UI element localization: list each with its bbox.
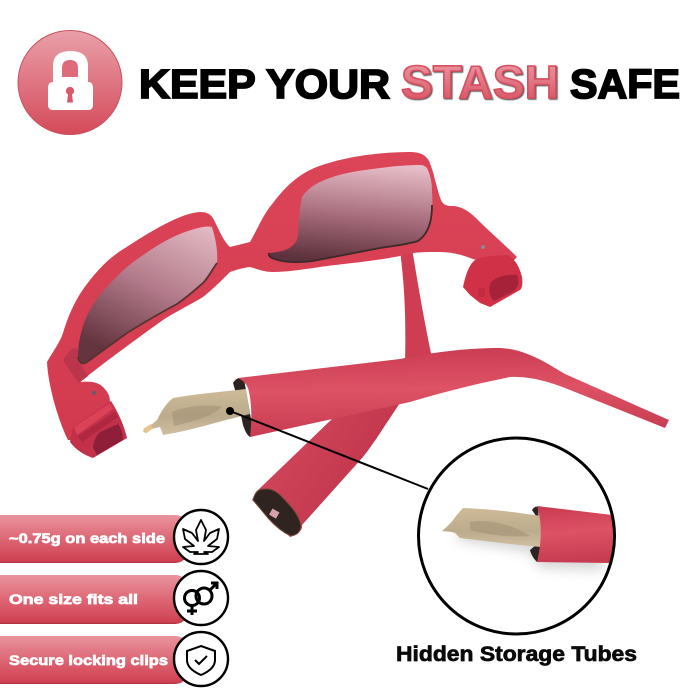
icon: gender symbols <box>174 571 228 625</box>
lower storage tube <box>252 403 400 537</box>
title: STASH <box>401 56 559 108</box>
tube interior <box>233 378 254 437</box>
feature bar: fit: One size fits all <box>9 591 138 607</box>
feature bar: capacity: ~0.75g on each side <box>9 530 165 546</box>
title: KEEP YOUR <box>139 61 390 107</box>
sunglasses <box>47 152 522 458</box>
left lens <box>78 227 217 363</box>
icon: cannabis leaf <box>174 510 228 564</box>
zoom circle callout <box>418 438 614 634</box>
pre-roll in tube <box>143 389 250 435</box>
feature bar: locking clips: Secure locking clips <box>9 652 168 668</box>
right lens <box>269 165 432 262</box>
lock badge icon <box>18 30 122 134</box>
left hinge connector <box>70 391 127 458</box>
inset tube <box>537 506 613 563</box>
inset pre-roll <box>442 508 541 547</box>
icon: shield check <box>174 632 228 686</box>
vertical temple arm <box>400 248 432 364</box>
inset pre-roll texture <box>470 521 530 537</box>
left lens dark rim <box>78 263 217 363</box>
glasses frame <box>47 152 517 440</box>
inner frame shading <box>63 348 88 383</box>
title <box>139 56 680 108</box>
feature bar: locking clips <box>0 636 190 684</box>
right lens dark rim <box>269 205 432 262</box>
inset tube interior <box>530 507 542 562</box>
callout pointer line <box>226 407 428 489</box>
upper temple tube <box>238 348 669 437</box>
feature bar: capacity <box>0 515 190 563</box>
right hinge connector <box>463 245 522 307</box>
caption: hidden storage tubes: Hidden Storage Tubes <box>396 643 637 666</box>
feature bar: fit <box>0 575 190 624</box>
title: SAFE <box>570 61 680 107</box>
